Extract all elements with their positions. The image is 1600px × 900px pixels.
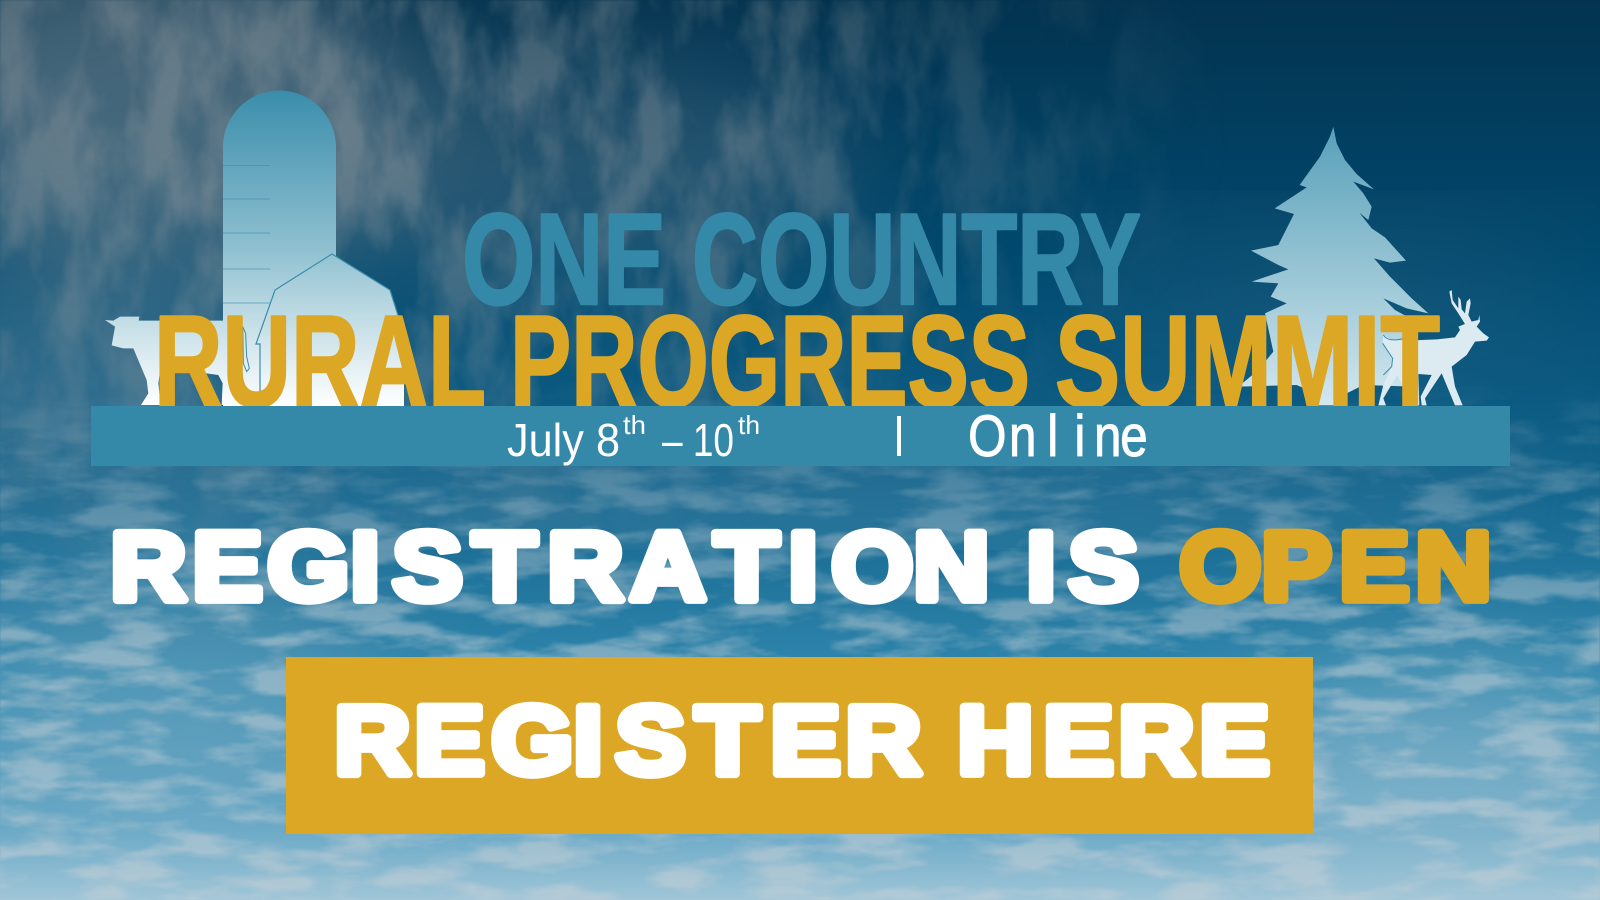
title: one country: ONE [462, 186, 666, 332]
title: one country: COUNTRY [692, 186, 1141, 332]
icon: deer [1378, 290, 1489, 405]
title: rural progress summit: SUMMIT [1055, 288, 1440, 434]
date: th [623, 410, 646, 440]
button: register here: HERE [957, 687, 1270, 795]
date: th [738, 410, 760, 440]
date and location bar [91, 404, 1510, 469]
icon: pine tree [1238, 127, 1428, 405]
icon: cow [105, 317, 249, 405]
headline: registration is open [110, 513, 1491, 621]
button: register here [286, 657, 1313, 834]
logo illustration: silo and barn [223, 90, 407, 406]
location: Online [968, 404, 1148, 469]
button: register here: REGISTER [335, 687, 921, 795]
separator [897, 416, 901, 456]
title: rural progress summit: RURAL [154, 288, 486, 434]
barn [256, 254, 407, 406]
silo rings [223, 166, 270, 303]
date: – 10 [662, 414, 734, 466]
headline: registration is open: REGISTRATION [110, 513, 989, 621]
title: rural progress summit: PROGRESS [510, 288, 1030, 434]
headline: registration is open: OPEN [1179, 513, 1491, 621]
silo [223, 90, 336, 406]
headline: registration is open: IS [1026, 513, 1139, 621]
date: July 8 [507, 414, 620, 466]
